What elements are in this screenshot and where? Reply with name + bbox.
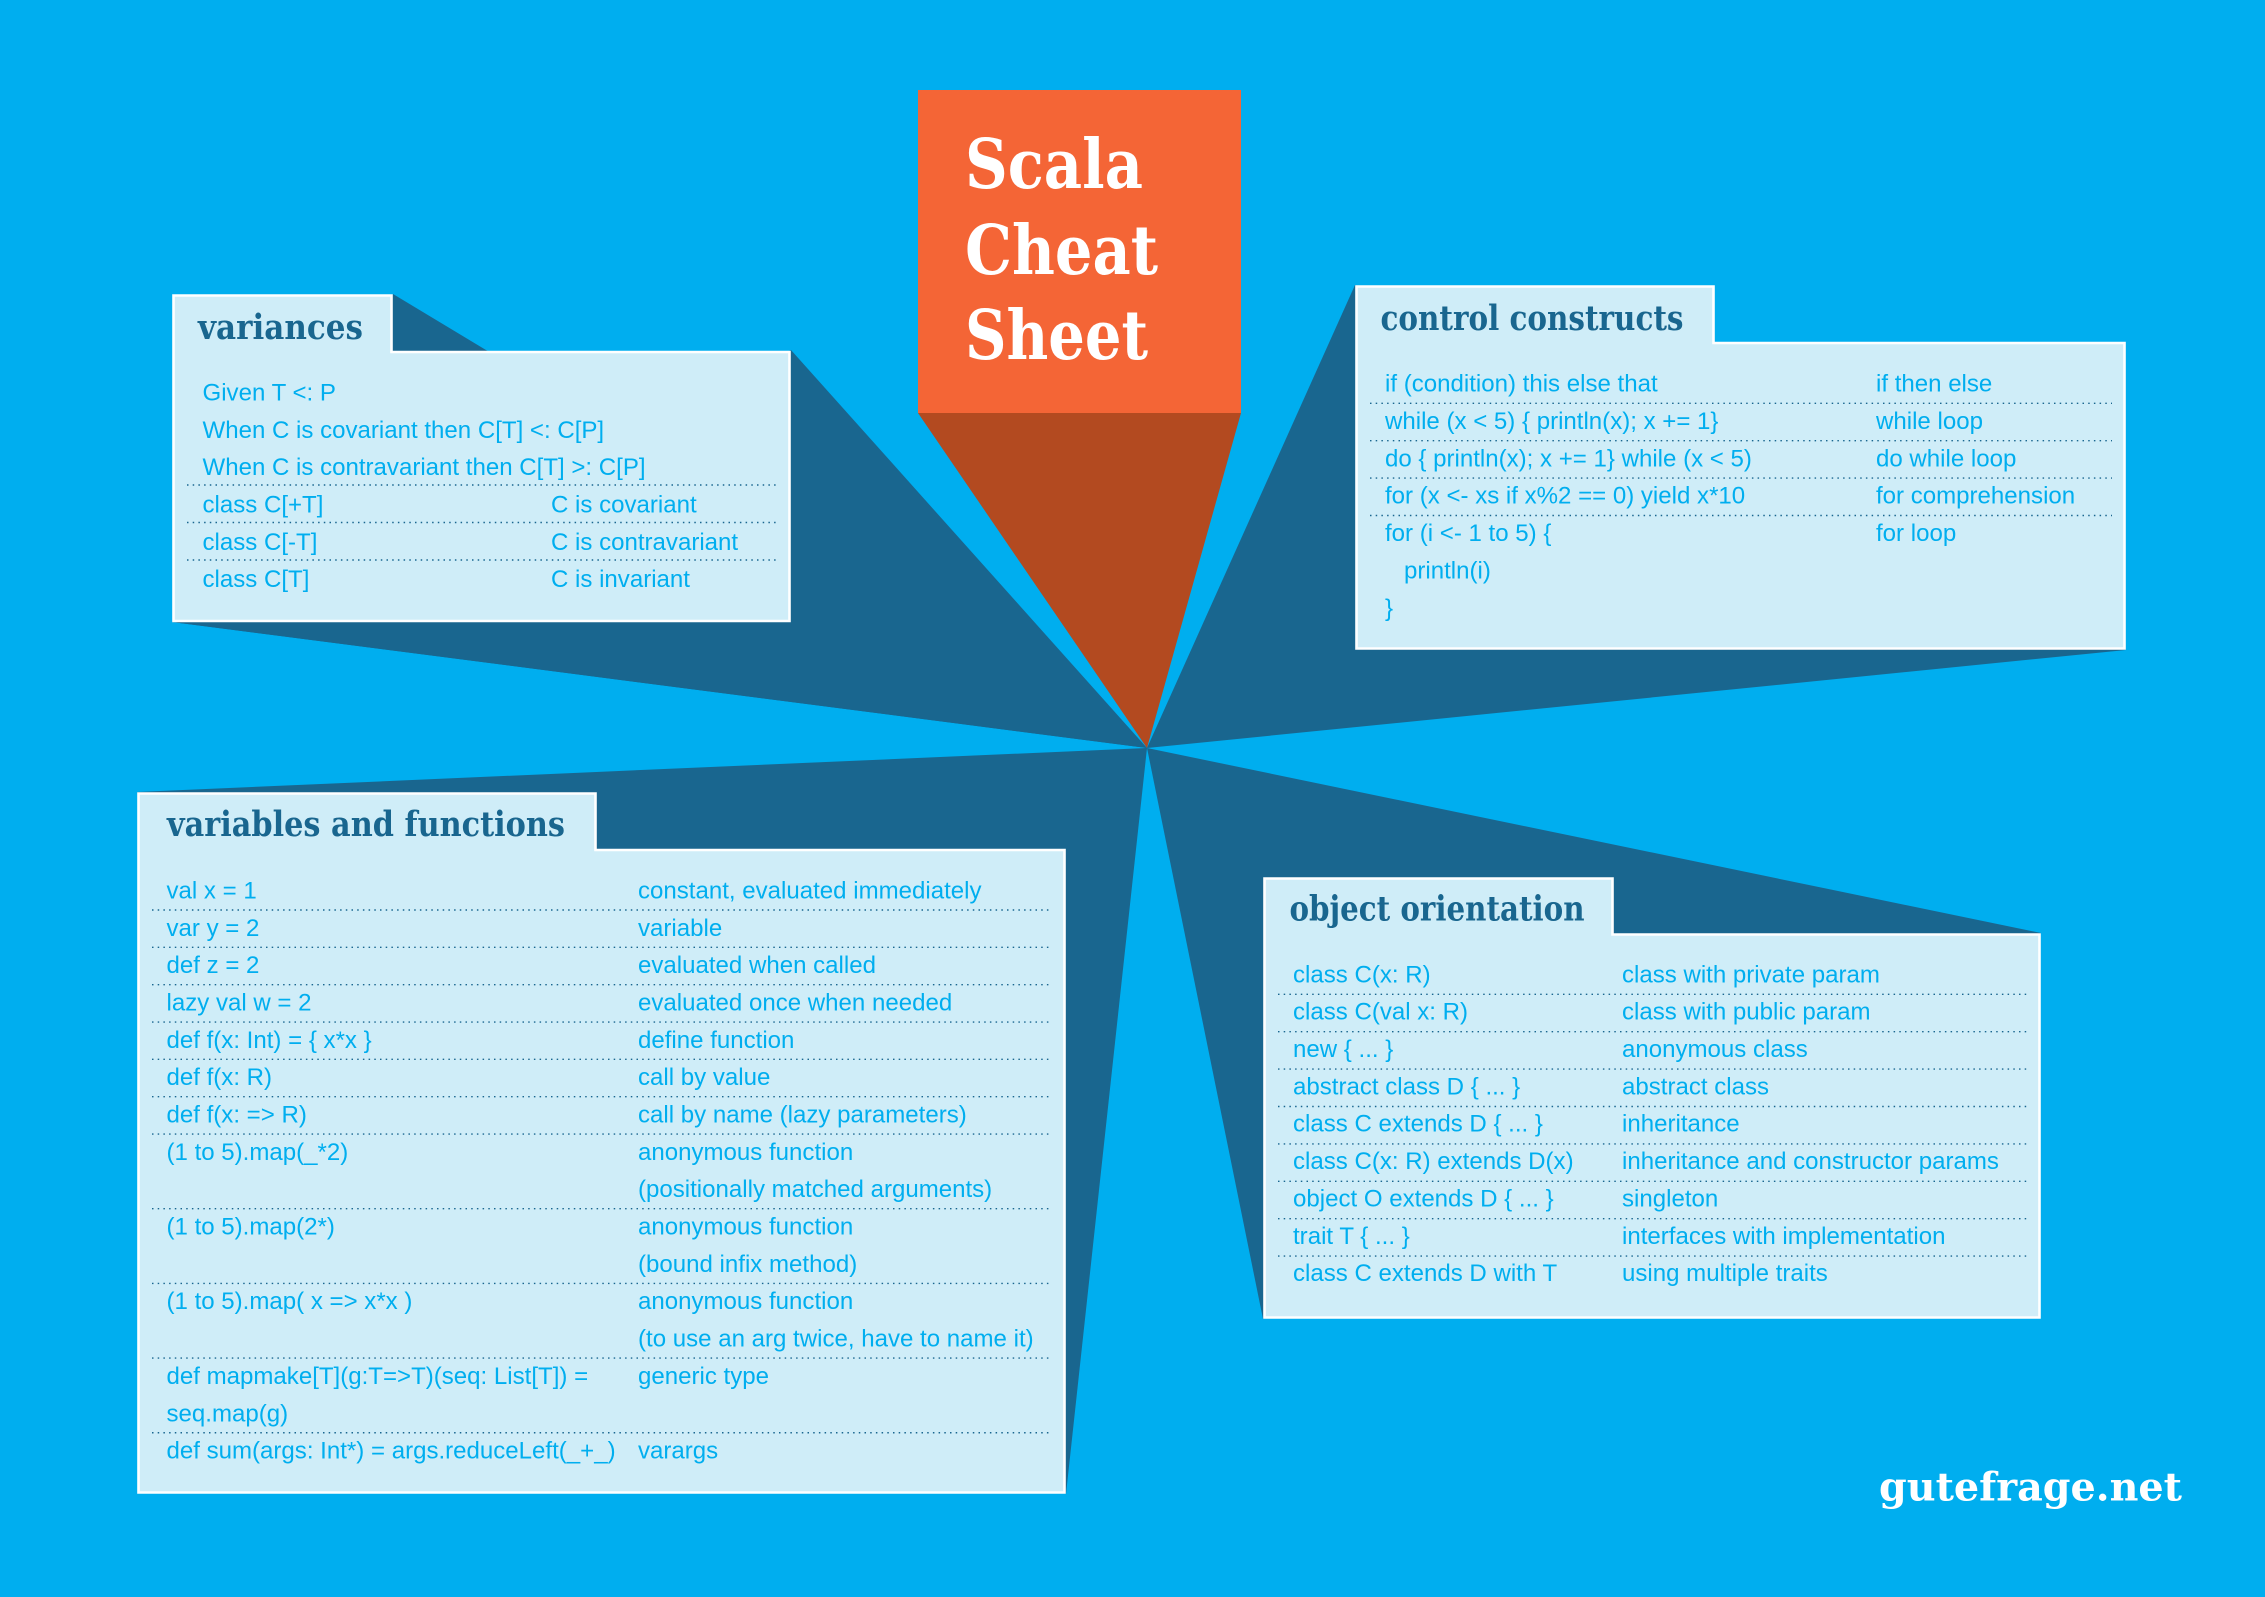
object orientation text: class C extends D with T bbox=[1293, 1260, 1557, 1287]
variables and functions text: varargs bbox=[638, 1438, 718, 1465]
variables and functions text: (positionally matched arguments) bbox=[638, 1176, 992, 1203]
variances text bbox=[202, 380, 738, 593]
variances text: class C[-T] bbox=[202, 529, 317, 556]
object orientation text: using multiple traits bbox=[1622, 1260, 1828, 1287]
variances text: When C is contravariant then C[T] >: C[P] bbox=[202, 454, 646, 481]
control constructs text: for (x <- xs if x%2 == 0) yield x*10 bbox=[1385, 483, 1745, 510]
title banner: Sheet bbox=[965, 296, 1148, 376]
object orientation text bbox=[1293, 962, 1999, 1287]
object orientation text: singleton bbox=[1622, 1185, 1718, 1212]
control constructs text: while (x < 5) { println(x); x += 1} bbox=[1384, 408, 1718, 435]
variables and functions text: evaluated once when needed bbox=[638, 990, 952, 1017]
variables and functions text: call by name (lazy parameters) bbox=[638, 1102, 967, 1129]
heading: variables and functions: variables and functions bbox=[166, 804, 565, 845]
variances text: class C[T] bbox=[202, 566, 309, 593]
heading: object orientation: object orientation bbox=[1290, 888, 1584, 930]
object orientation text: class with private param bbox=[1622, 962, 1880, 988]
variables and functions text: def f(x: => R) bbox=[166, 1102, 307, 1129]
variables and functions text: var y = 2 bbox=[166, 915, 259, 942]
object orientation text: class C extends D { ... } bbox=[1293, 1111, 1543, 1138]
object orientation text: inheritance and constructor params bbox=[1622, 1148, 1999, 1175]
variables and functions text: call by value bbox=[638, 1064, 770, 1091]
panel: variances bbox=[174, 296, 790, 621]
variables and functions text: def z = 2 bbox=[166, 952, 259, 979]
title banner bbox=[918, 90, 1241, 748]
object orientation text: class C(val x: R) bbox=[1293, 999, 1468, 1026]
panel: object orientation bbox=[1264, 878, 2040, 1318]
heading: variances: variances bbox=[197, 307, 363, 348]
variances text: C is covariant bbox=[551, 492, 697, 518]
control constructs text: while loop bbox=[1875, 408, 1983, 435]
control constructs text bbox=[1384, 370, 2075, 622]
variables and functions text: anonymous function bbox=[638, 1288, 853, 1315]
variables and functions text: def sum(args: Int*) = args.reduceLeft(_+_) bbox=[166, 1438, 616, 1465]
object orientation text: new { ... } bbox=[1293, 1036, 1393, 1063]
radial shadows bbox=[137, 285, 2126, 1494]
variables and functions text: (1 to 5).map(2*) bbox=[166, 1214, 335, 1241]
control constructs text: if then else bbox=[1876, 370, 1992, 398]
variances text: Given T <: P bbox=[202, 380, 336, 406]
title banner: Cheat bbox=[965, 211, 1159, 291]
logo: gutefrage.net: gutefrage.net bbox=[1879, 1464, 2182, 1510]
object orientation text: object O extends D { ... } bbox=[1293, 1185, 1554, 1212]
control constructs text: } bbox=[1385, 595, 1393, 622]
variables and functions text: constant, evaluated immediately bbox=[638, 878, 982, 904]
variances text: C is invariant bbox=[551, 566, 690, 593]
variables and functions text: def f(x: R) bbox=[166, 1064, 272, 1091]
heading: control constructs: control constructs bbox=[1380, 298, 1684, 339]
object orientation text: abstract class bbox=[1622, 1073, 1769, 1100]
variables and functions text: define function bbox=[638, 1027, 794, 1054]
object orientation text: class C(x: R) bbox=[1293, 962, 1431, 988]
control constructs text: do while loop bbox=[1876, 445, 2016, 472]
control constructs text: if (condition) this else that bbox=[1385, 370, 1658, 398]
variances text: When C is covariant then C[T] <: C[P] bbox=[202, 417, 604, 444]
variables and functions text: def mapmake[T](g:T=>T)(seq: List[T]) = bbox=[166, 1363, 588, 1390]
panel: control constructs bbox=[1356, 286, 2124, 648]
variances text: C is contravariant bbox=[551, 529, 738, 556]
variables and functions text: val x = 1 bbox=[166, 878, 257, 904]
variables and functions text: (1 to 5).map(_*2) bbox=[166, 1139, 348, 1166]
object orientation text: abstract class D { ... } bbox=[1293, 1073, 1520, 1100]
variables and functions text: variable bbox=[638, 915, 722, 942]
variables and functions text: def f(x: Int) = { x*x } bbox=[166, 1027, 372, 1054]
control constructs text: for comprehension bbox=[1876, 483, 2075, 510]
object orientation text: class with public param bbox=[1622, 999, 1871, 1026]
title banner: Scala bbox=[965, 125, 1143, 205]
control constructs text: println(i) bbox=[1404, 558, 1491, 584]
variables and functions text: lazy val w = 2 bbox=[166, 990, 312, 1017]
object orientation text: anonymous class bbox=[1622, 1036, 1808, 1063]
variables and functions text: seq.map(g) bbox=[166, 1400, 288, 1427]
variables and functions text: (bound infix method) bbox=[638, 1251, 857, 1278]
variables and functions text bbox=[166, 878, 1034, 1465]
control constructs text: for loop bbox=[1876, 520, 1956, 547]
panel: variables and functions bbox=[138, 794, 1064, 1492]
object orientation text: interfaces with implementation bbox=[1622, 1223, 1945, 1250]
variables and functions text: evaluated when called bbox=[638, 952, 876, 979]
object orientation text: class C(x: R) extends D(x) bbox=[1293, 1148, 1574, 1175]
object orientation text: inheritance bbox=[1622, 1111, 1740, 1138]
variables and functions text: anonymous function bbox=[638, 1214, 853, 1241]
variables and functions text: generic type bbox=[638, 1363, 769, 1390]
variables and functions text: (to use an arg twice, have to name it) bbox=[638, 1326, 1034, 1353]
object orientation text: trait T { ... } bbox=[1293, 1223, 1410, 1250]
control constructs text: do { println(x); x += 1} while (x < 5) bbox=[1385, 445, 1752, 472]
variables and functions text: (1 to 5).map( x => x*x ) bbox=[166, 1288, 412, 1315]
variances text: class C[+T] bbox=[202, 492, 323, 518]
variables and functions text: anonymous function bbox=[638, 1139, 853, 1166]
control constructs text: for (i <- 1 to 5) { bbox=[1385, 520, 1551, 547]
